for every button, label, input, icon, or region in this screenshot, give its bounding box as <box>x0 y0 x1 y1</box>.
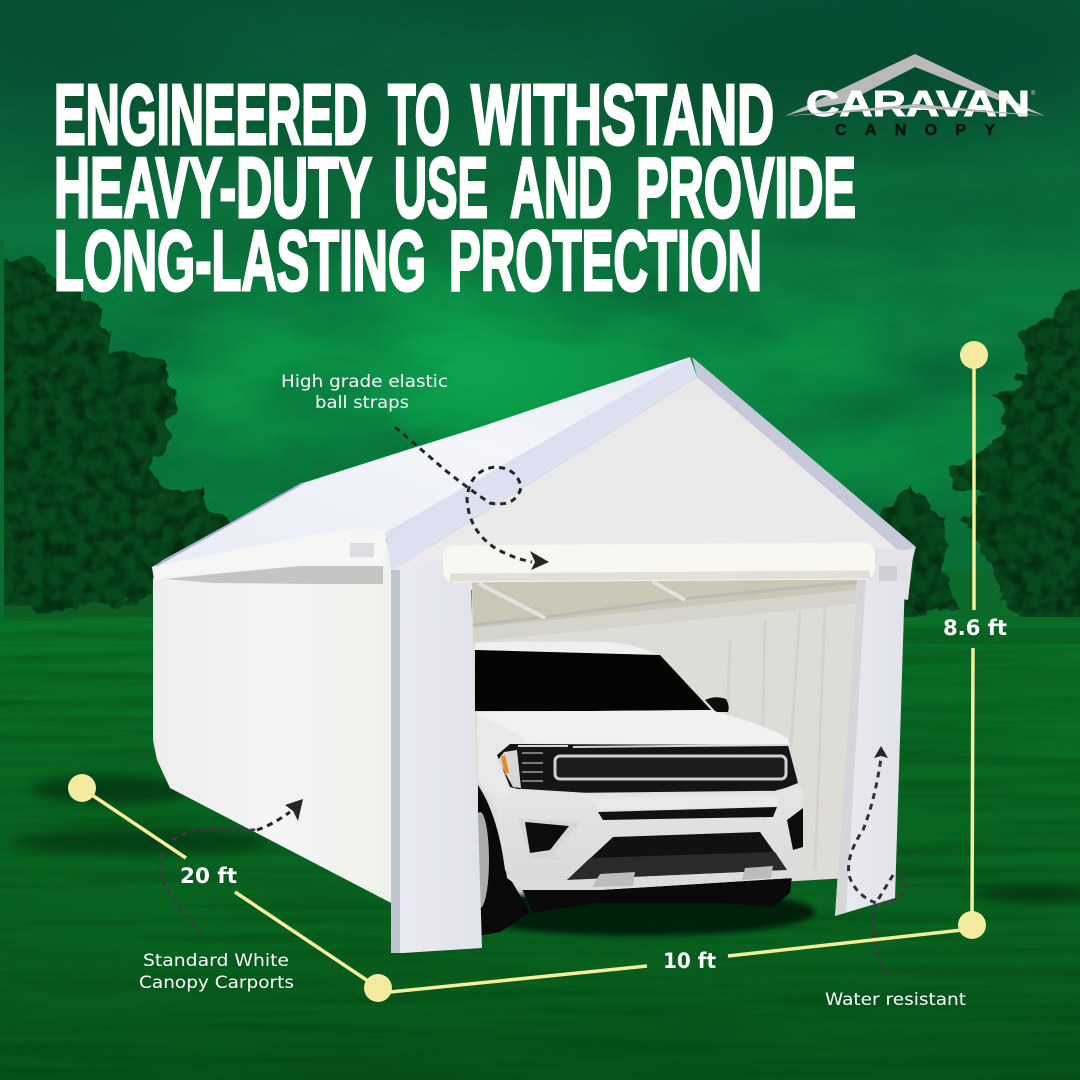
tyre <box>478 785 530 936</box>
valance <box>152 528 386 580</box>
windscreen <box>475 650 712 711</box>
title: HEAVY-DUTY <box>54 141 372 236</box>
side wall <box>153 540 397 906</box>
interior ceiling <box>472 574 858 628</box>
dimension: 8.6 ft <box>943 341 1007 939</box>
title: WITHSTAND <box>471 68 774 163</box>
logo: Caravan Canopy: CANOPY <box>835 122 995 139</box>
lower intake <box>567 832 787 880</box>
right front panel <box>835 575 905 916</box>
headlight <box>498 750 521 788</box>
title: LONG-LASTING <box>54 214 426 309</box>
title: PROVIDE <box>636 141 856 236</box>
shadow under valance <box>153 565 383 584</box>
background trees right <box>880 285 1080 630</box>
logo: Caravan Canopy: ® <box>1031 90 1036 97</box>
dimension: 20 ft: 20 ft <box>180 864 237 888</box>
background sky <box>0 0 1080 640</box>
logo: Caravan Canopy <box>785 54 1045 139</box>
callout: standard white canopy: Canopy Carports <box>139 973 294 993</box>
back wall folds <box>722 605 825 870</box>
skid plate <box>507 867 802 890</box>
callout: elastic ball straps: ball straps <box>315 393 409 413</box>
right roof edge <box>692 357 916 562</box>
roof <box>152 357 690 568</box>
title: PROTECTION <box>449 214 762 309</box>
upper bumper panel <box>592 796 778 810</box>
callout: standard white canopy <box>139 799 303 993</box>
ground shadow <box>465 888 815 936</box>
left fog light <box>518 818 580 860</box>
callout: standard white canopy: Standard White <box>143 951 289 971</box>
callout: elastic ball straps: High grade elastic <box>281 372 448 392</box>
callout: water resistant <box>825 746 966 1010</box>
mirror <box>705 697 729 712</box>
logo: Caravan Canopy: CARAVAN <box>806 83 1030 124</box>
small logo tags <box>350 543 374 557</box>
gable front <box>392 377 905 600</box>
dimension: 10 ft: 10 ft <box>663 949 716 973</box>
chrome grille frame <box>555 756 786 779</box>
title: TO <box>388 68 450 163</box>
callout: elastic ball straps <box>281 372 549 570</box>
right fog light <box>787 808 803 850</box>
rim <box>471 812 489 908</box>
title: AND <box>510 141 612 236</box>
SUV <box>465 642 815 936</box>
lawn <box>0 617 1080 1080</box>
roof <box>475 642 660 656</box>
upper right column <box>856 548 914 600</box>
hood <box>483 710 788 745</box>
rolled door <box>443 542 875 583</box>
black slot <box>598 807 777 820</box>
dimension: 20 ft <box>68 774 392 1002</box>
background trees left <box>0 240 236 620</box>
front body <box>477 710 803 890</box>
grille block <box>497 744 798 794</box>
underbody <box>517 868 793 913</box>
left front panel <box>391 560 482 953</box>
title <box>54 68 856 309</box>
interior back wall <box>472 574 860 900</box>
roof edge band <box>385 357 697 572</box>
carport canopy <box>152 357 916 916</box>
dimension: 10 ft <box>390 930 962 992</box>
dimension: 8.6 ft: 8.6 ft <box>943 616 1007 640</box>
title: ENGINEERED <box>54 68 367 163</box>
title: USE <box>394 141 488 236</box>
callout: water resistant: Water resistant <box>825 990 966 1010</box>
fender <box>477 716 527 798</box>
